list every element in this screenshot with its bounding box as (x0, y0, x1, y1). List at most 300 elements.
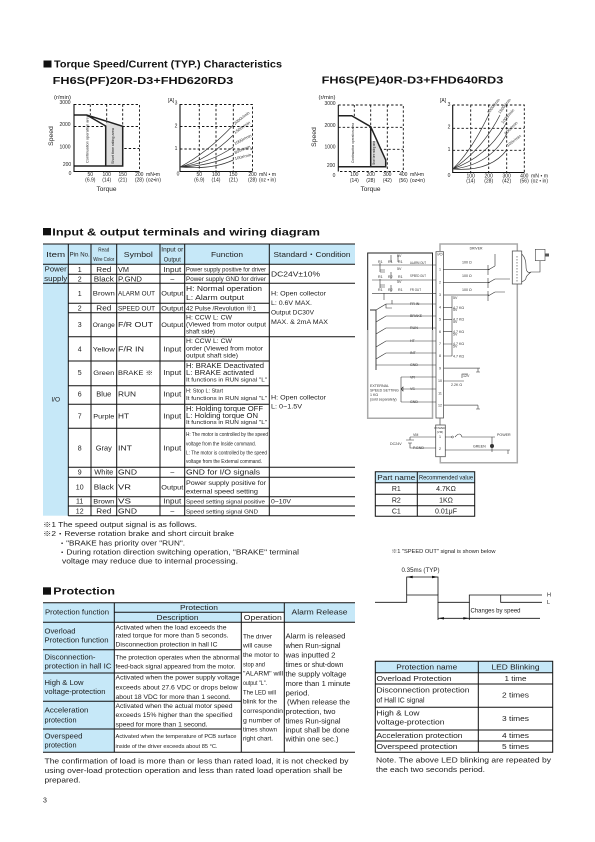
table: LED blinking: 4 times (502, 733, 530, 740)
table: protection: will cause (242, 642, 272, 650)
table: input and output terminals: 3 (78, 322, 82, 329)
table: protection: speed for more than 1 second. (116, 722, 208, 728)
chart: current vs torque 20R: (28) (248, 178, 257, 184)
chart: current vs torque 20R: 1 (175, 146, 178, 152)
table: protection: Description (156, 615, 199, 622)
table: protection: when Run-signal (284, 643, 341, 650)
wiring diagram: 7 (439, 342, 441, 346)
chart: current vs torque 20R: 800r/min (234, 144, 251, 155)
chart: speed vs torque 20R: 1000 (59, 144, 71, 150)
table: input and output terminals: L: 0~1.5V (271, 404, 303, 410)
wiring diagram: (sold separately) (370, 398, 397, 402)
box: power terminal (436, 425, 445, 457)
wiring diagram: 5V (397, 280, 402, 284)
footnotes: ・During rotation direction switching operation, "BRAKE" terminal (58, 550, 300, 556)
chart: current vs torque 20R: 100r/min (234, 152, 252, 161)
wiring diagram: R1 (388, 260, 393, 264)
table: input and output terminals: L: The motor is controlled by the speed (186, 450, 267, 456)
table: input and output terminals: MAX. & 2mA MAX (271, 319, 329, 326)
table: LED blinking: of Hall IC signal (376, 698, 425, 704)
chart: speed vs torque 40R: (oz•in) (410, 178, 425, 184)
table: protection: The protection operates when the abnormal (116, 654, 240, 662)
chart: speed vs torque 20R: Continuation operation area (86, 115, 90, 163)
wiring diagram: 8 (439, 354, 441, 358)
wiring diagram: I/O (437, 252, 443, 256)
table: protection: Disconnection- (44, 654, 96, 662)
table: part name values: C1 (392, 508, 401, 516)
table: input and output terminals: Power supply positive for (186, 480, 267, 487)
timing chart: speed out: Changes by speed (470, 608, 520, 614)
table: protection: output "L". (243, 680, 267, 687)
chart: current vs torque 40R: 100r/min (506, 133, 522, 148)
wiring diagram: 100 Ω (462, 260, 472, 264)
table: protection: protection, two (286, 709, 336, 716)
note: load confirmation (44, 758, 349, 784)
table: input and output terminals: shaft side) (186, 329, 215, 335)
table: protection: times shown (243, 726, 277, 734)
wiring diagram: 12 (438, 404, 442, 408)
table: input and output terminals: Output (161, 290, 184, 298)
subheading: FH6S(PE)40R model: FH6S(PE)40R-D3+FHD640RD3 (322, 74, 503, 86)
wiring diagram: 6 (439, 330, 441, 334)
table: input and output terminals: GND for I/O signals (186, 470, 261, 476)
table: input and output terminals: Brown (93, 290, 115, 298)
wiring diagram: R1 (378, 275, 383, 279)
table: input and output terminals: 12 (76, 508, 84, 515)
chart: speed vs torque 40R: 1000 (324, 144, 336, 150)
wiring diagram: R2 (388, 275, 393, 279)
wiring diagram: SPEED SETTING (370, 388, 399, 392)
wiring diagram: SPEED OUT (410, 274, 427, 278)
table: input and output terminals: L: Holding torque ON (186, 413, 258, 420)
table: input and output terminals: 11 (76, 498, 83, 506)
table: protection: g number of (243, 718, 280, 724)
table: protection (43, 603, 355, 752)
table: input and output terminals: supply (44, 276, 68, 283)
chart: speed vs torque 20R: Short time rating area (111, 128, 115, 164)
timing chart: speed out: H (547, 592, 551, 598)
footnotes: ・"BRAKE has priority over "RUN". (58, 540, 185, 548)
chart: speed vs torque 20R: (r/min) (54, 95, 71, 101)
chart: current vs torque 20R: 100 (212, 172, 220, 178)
table: input and output terminals: – (170, 470, 174, 476)
table: protection: Activated when the load exceeds the (116, 624, 227, 632)
chart: current vs torque 20R: 50 (197, 172, 202, 178)
chart: speed vs torque 40R: 400 (399, 172, 408, 178)
chart: current vs torque 40R: 100 (467, 174, 475, 180)
footnotes: voltage may reduce due to internal processing. (62, 558, 238, 566)
wiring diagram: 11 (438, 392, 442, 396)
chart: speed vs torque 40R (311, 95, 425, 193)
wiring diagram: 4.7 KΩ (453, 342, 464, 346)
table: input and output terminals: Input (163, 392, 181, 398)
table: input and output terminals: 6 (78, 392, 82, 398)
table: input and output terminals: INT (118, 446, 133, 452)
table: input and output terminals: Speed setting signal GND (186, 509, 258, 515)
table: protection: voltage-protection (44, 689, 106, 696)
wiring diagram: P.GND (413, 446, 424, 450)
chart: speed vs torque 40R: 0 (333, 173, 336, 179)
table: input and output terminals: DC24V±10% (271, 272, 320, 278)
chart: speed vs torque 20R: (6.9) (85, 178, 96, 184)
table: protection: inside of the driver exceeds about 85 °C. (116, 744, 218, 750)
subheading: FH6S(PF)20R model: FH6S(PF)20R-D3+FHD620RD3 (53, 75, 233, 87)
table: input and output terminals: Output (161, 305, 184, 312)
chart: current vs torque 20R: (6.9) (194, 178, 205, 184)
table: input and output terminals: F/R OUT (118, 322, 154, 329)
chart: current vs torque 40R (440, 97, 548, 184)
wiring diagram: 2.2K Ω (451, 383, 462, 387)
chart: speed vs torque 20R: (28) (135, 178, 144, 184)
table: input and output terminals: H: Holding torque OFF (186, 406, 263, 413)
table: LED blinking: Disconnection protection (376, 688, 470, 694)
table: input and output terminals: Input (163, 370, 181, 377)
table: input and output terminals: Read (98, 248, 110, 254)
table: input and output terminals: – (170, 508, 174, 515)
table: input and output terminals: GND (118, 508, 137, 515)
table: LED blinking: Overload Protection (376, 676, 452, 683)
chart: speed vs torque 20R: 150 (119, 172, 127, 178)
table: LED blinking (375, 661, 553, 752)
table: input and output terminals: 10 (76, 484, 84, 492)
chart: current vs torque 40R: (56) (520, 178, 529, 184)
table: protection: about 18 VDC for more than 1 second. (116, 694, 231, 701)
chart: speed vs torque 40R: (42) (383, 178, 392, 184)
note: LED blinking: the each two seconds period. (376, 767, 485, 774)
table: protection: High & Low (44, 680, 85, 687)
wiring diagram: 3 (439, 293, 441, 297)
wiring diagram: 10 (438, 379, 442, 383)
chart: speed vs torque 40R: 200 (327, 163, 335, 169)
chart: current vs torque 40R: 800r/min (503, 120, 519, 136)
table: input and output terminals: VR (118, 484, 131, 492)
table: protection: Alarm is released (286, 634, 346, 640)
chart: current vs torque 40R: 1000r/min (500, 108, 515, 125)
table: input and output terminals: 0~10V (271, 499, 291, 505)
chart: current vs torque 40R: 0 (448, 173, 451, 179)
table: input and output terminals: White (94, 470, 113, 476)
table: protection: feed-back signal appeared from the motor. (116, 664, 236, 670)
chart: current vs torque 40R: 2000r/min (486, 97, 501, 115)
table: input and output terminals: It functions in RUN signal "L" (186, 420, 267, 426)
chart: speed vs torque 20R: Torque (96, 186, 117, 193)
table: input and output terminals: H: Normal operation (186, 286, 262, 293)
chart: current vs torque 40R: (14) (466, 178, 475, 184)
chart: speed vs torque 40R: (14) (350, 178, 359, 184)
table: protection: Acceleration (44, 708, 89, 714)
table: input and output terminals: order (Viewed from motor (186, 346, 263, 352)
timing chart: speed out: L (547, 600, 550, 606)
chart: current vs torque 40R: 3 (448, 102, 451, 108)
table: protection: protection in hall IC (44, 664, 112, 670)
wiring diagram: 4.7 KΩ (453, 318, 464, 322)
table: protection: exceeds about 27.6 VDC or drops below (116, 684, 238, 692)
table: LED blinking: 5 times (502, 744, 530, 751)
wiring diagram: 2 (439, 280, 441, 284)
table: input and output terminals: RUN (118, 392, 136, 398)
wiring diagram: 4.7 KΩ (453, 306, 464, 310)
table: input and output terminals: Gray (96, 446, 112, 452)
table: protection: times Run-signal (286, 718, 341, 726)
wiring diagram: GND (410, 400, 418, 404)
table: input and output terminals: (Viewed from motor output (186, 322, 266, 328)
note: LED blinking: Note. The above LED blinking are repeated by (376, 758, 552, 764)
table: protection: Operation (244, 615, 282, 622)
chart: speed vs torque 20R: (21) (118, 178, 127, 184)
chart: current vs torque 40R: 300 (503, 174, 511, 180)
table: input and output terminals: H: BRAKE Deactivated (186, 363, 264, 370)
chart: current vs torque 20R: mN • m (259, 172, 276, 178)
box: connector to motor (512, 251, 522, 284)
chart: speed vs torque 20R: mN•m (146, 172, 160, 178)
chart: current vs torque 20R: (oz • in) (259, 178, 276, 184)
wiring diagram: 5V (453, 308, 458, 312)
chart: speed vs torque 40R: Torque (360, 186, 381, 193)
wiring diagram: 5V (453, 320, 458, 324)
table: input and output terminals: Brown (93, 499, 114, 505)
table: input and output terminals: Red (96, 508, 111, 515)
table: protection: right chart. (243, 736, 273, 742)
chart: speed vs torque 20R: (14) (102, 178, 111, 184)
table: protection: exceeds 15% higher than the specified (116, 712, 233, 719)
table: protection: Activated when the temperature of PCB surface (116, 734, 236, 740)
wiring diagram: DC24V (390, 442, 402, 446)
table: protection: Protection (180, 605, 218, 612)
table: input and output terminals: H: Open collector (271, 290, 326, 298)
chart: speed vs torque 40R: Continuation operation area (351, 123, 355, 163)
table: input and output terminals: voltage from the External command. (186, 459, 262, 465)
chart: current vs torque 40R: 400 (520, 174, 529, 180)
icon: motor (517, 249, 549, 282)
table: input and output terminals: Input (163, 346, 181, 354)
table: protection: blink for the (243, 698, 277, 706)
wiring diagram: 4 (439, 306, 441, 310)
chart: speed vs torque 20R: (oz•in) (146, 178, 161, 184)
table: protection: Protection function (44, 638, 109, 644)
table: input and output terminals: external speed setting (186, 489, 258, 496)
table: part name values: 0.01μF (435, 508, 457, 516)
chart: speed vs torque 20R: 2000 (59, 122, 71, 128)
table: input and output terminals: Power (45, 266, 67, 274)
table: input and output terminals: 7 (78, 414, 82, 420)
chart: current vs torque 20R: (21) (229, 178, 238, 184)
wiring diagram: INT (410, 351, 417, 355)
table: input and output terminals: Purple (93, 414, 115, 420)
table: protection: Disconnection protection in hall IC (116, 642, 218, 648)
table: input and output terminals: VM (118, 267, 129, 274)
table: input and output terminals: Black (94, 276, 114, 283)
wiring diagram: R1 (398, 275, 403, 279)
note: LED blinking (376, 758, 552, 774)
table: protection: input shall be done (286, 728, 350, 734)
wiring diagram: 2 (439, 447, 441, 451)
table: LED blinking: 1 time (504, 676, 527, 683)
table: input and output terminals: SPEED OUT (118, 306, 155, 312)
table: part name values: Part name (377, 473, 415, 482)
wiring diagram: (VM) (437, 430, 443, 434)
table: part name values: R1 (392, 486, 401, 493)
chart: speed vs torque 40R: 3000 (324, 101, 336, 107)
table: input and output terminals: H: CCW L: CW (186, 339, 232, 345)
wiring diagram: FR IN (410, 302, 420, 306)
table: input and output terminals: Input (163, 267, 181, 274)
chart: speed vs torque 40R: 2000 (324, 123, 336, 129)
chart: current vs torque 20R: 1500r/min (233, 120, 251, 135)
chart: speed vs torque 20R: 0 (69, 171, 72, 177)
wiring diagram: 5V (397, 267, 402, 271)
table: input and output terminals: 2 (78, 306, 82, 312)
table: protection: correspondin (243, 708, 283, 715)
chart: speed vs torque 40R: Short time rating area (372, 141, 376, 165)
chart: speed vs torque 20R (48, 95, 161, 193)
table: protection: was inputted 2 (284, 652, 336, 660)
table: input and output terminals: Red (96, 306, 111, 312)
note: speed out signal: ※1 "SPEED OUT" signal is shown below (392, 548, 496, 555)
table: protection: the motor to (243, 652, 279, 659)
chart: speed vs torque 20R: 100 (103, 172, 111, 178)
table: part name values: R2 (392, 498, 401, 504)
table: input and output terminals: It functions in RUN signal "L" (186, 378, 267, 384)
chart: speed vs torque 40R: 300 (383, 172, 392, 178)
chart: current vs torque 20R: 150 (229, 172, 238, 178)
wiring diagram: 5 (439, 318, 441, 322)
chart: speed vs torque 40R: mN•m (410, 172, 424, 178)
wiring diagram: 100 Ω (462, 274, 472, 278)
table: input and output terminals: output shaft side) (186, 353, 238, 359)
table: input and output terminals: Output DC30V (271, 309, 315, 316)
table: input and output terminals: 8 (78, 446, 82, 452)
chart: current vs torque 40R: mN • m (531, 174, 548, 180)
table: input and output terminals: F/R IN (118, 346, 144, 354)
table: input and output terminals: 2 (78, 276, 82, 283)
table: protection: Overspeed (44, 734, 83, 740)
wiring diagram: BRAKE (410, 314, 423, 318)
table: input and output terminals: BRAKE ※ (118, 370, 153, 377)
table: input and output terminals: 1 (78, 267, 82, 274)
table: protection: Protection function (45, 610, 109, 616)
wiring diagram: HT (410, 339, 416, 343)
table: input and output terminals: HT (118, 414, 130, 420)
chart: current vs torque 40R: [A] (440, 98, 447, 104)
table: protection: Activated when the power supply voltage (116, 674, 240, 682)
table: protection: Alarm Release (292, 610, 348, 616)
note: load confirmation: prepared. (44, 778, 81, 784)
table: input and output terminals: Symbol (124, 250, 153, 259)
table: input and output terminals: Speed setting signal positive (186, 499, 265, 505)
note: load confirmation: using over-load protection operation and less than rated load operation shall be (44, 768, 343, 775)
wiring diagram: 9 (439, 366, 441, 370)
table: part name values: 1KΩ (439, 498, 453, 504)
table: part name values: 4.7KΩ (436, 486, 456, 493)
table: input and output terminals: I/O (51, 396, 60, 404)
chart: speed vs torque 20R: 200 (135, 172, 144, 178)
table: LED blinking: Protection name (396, 664, 457, 672)
table: protection: (When release the (287, 700, 350, 706)
table: LED blinking: 2 times (502, 692, 530, 700)
wiring diagram: VM (413, 433, 418, 437)
table: protection: within one sec.) (284, 736, 338, 744)
heading: torque speed/current characteristics: Torque Speed/Current (TYP.) Characteristics (54, 58, 282, 70)
table: input and output terminals: L: Alarm output (186, 295, 244, 302)
wiring diagram: R1 (378, 288, 383, 292)
table: input and output terminals: Input or (161, 248, 183, 254)
table: input and output terminals: 42 Pulse /Revolution ※1 (186, 305, 257, 312)
table: input and output terminals: H: Stop L: Start (186, 388, 223, 394)
chart: current vs torque 40R: (42) (502, 178, 511, 184)
table: input and output terminals: Input (163, 414, 181, 420)
note: load confirmation: The confirmation of load is more than or less than rated load, it is not checked by (44, 758, 349, 766)
table: input and output terminals: Wire Color (93, 257, 115, 263)
heading: input and output terminals: Input & output terminals and wiring diagram (52, 226, 320, 238)
chart: current vs torque 20R: 0 (177, 172, 180, 178)
wiring diagram: R1 (398, 260, 403, 264)
table: input and output terminals: 4 (78, 346, 82, 354)
wiring diagram: RUN (410, 326, 418, 330)
wiring diagram: 1 (439, 268, 441, 272)
chart: speed vs torque 40R: 200 (367, 172, 375, 178)
chart: current vs torque 40R: (28) (484, 178, 493, 184)
wiring diagram: 5V (453, 344, 458, 348)
heading: protection: Protection (53, 586, 115, 598)
wiring diagram: R1 (378, 260, 383, 264)
wiring diagram: POWER (497, 433, 511, 437)
table: input and output terminals (43, 244, 355, 516)
wiring diagram: GND (410, 363, 418, 367)
table: LED blinking: voltage-protection (376, 720, 445, 726)
table: input and output terminals: Green (93, 370, 115, 377)
table: input and output terminals: H: CCW L: CW (186, 315, 232, 321)
wiring diagram: 4.7 KΩ (453, 330, 464, 334)
wiring diagram: VS (410, 387, 415, 391)
chart: current vs torque 40R: 2 (448, 124, 451, 130)
table: input and output terminals: Pin No. (70, 252, 90, 258)
table: protection: Activated when the actual motor speed (116, 703, 233, 710)
wiring diagram: VR (410, 376, 415, 380)
table: protection: times or shut-down (286, 662, 344, 669)
chart: current vs torque 40R: 1 (448, 147, 451, 153)
table: input and output terminals: Standard・Condition (274, 250, 350, 259)
table: input and output terminals: Orange (93, 322, 115, 329)
chart: current vs torque 20R: 3 (175, 100, 178, 106)
table: input and output terminals: – (170, 276, 174, 283)
table: input and output terminals: It functions in RUN signal "L" (186, 396, 267, 402)
table: part name values (375, 472, 475, 516)
table: input and output terminals: H: Open collector (271, 394, 326, 402)
table: LED blinking: High & Low (376, 710, 421, 718)
wiring diagram: 4.7 KΩ (453, 354, 464, 358)
table: input and output terminals: 5 (78, 370, 82, 377)
table: protection: stop and (243, 662, 265, 668)
table: input and output terminals: Output (164, 258, 181, 264)
table: input and output terminals: Black (94, 484, 114, 492)
table: input and output terminals: Input (163, 446, 181, 452)
wiring diagram: POWER (434, 426, 446, 430)
chart: current vs torque 20R: 2000r/min (233, 110, 251, 126)
table: protection: period. (286, 690, 310, 698)
table: input and output terminals: P.GND (118, 276, 142, 283)
table: input and output terminals: Input (163, 498, 181, 506)
wiring diagram: FR OUT (410, 288, 422, 292)
wiring diagram: 5V (397, 254, 402, 258)
chart: speed vs torque 40R: 100 (350, 172, 359, 178)
table: protection: The driver (243, 634, 273, 640)
table: protection: The LED will (243, 690, 277, 696)
chart: speed vs torque 40R: (56) (399, 178, 408, 184)
chart: speed vs torque 40R: (r/min) (318, 95, 336, 101)
table: input and output terminals: Power supply positive for driver (186, 268, 266, 274)
wiring diagram: R1 (398, 288, 403, 292)
wiring diagram: 1 KΩ (370, 393, 378, 397)
